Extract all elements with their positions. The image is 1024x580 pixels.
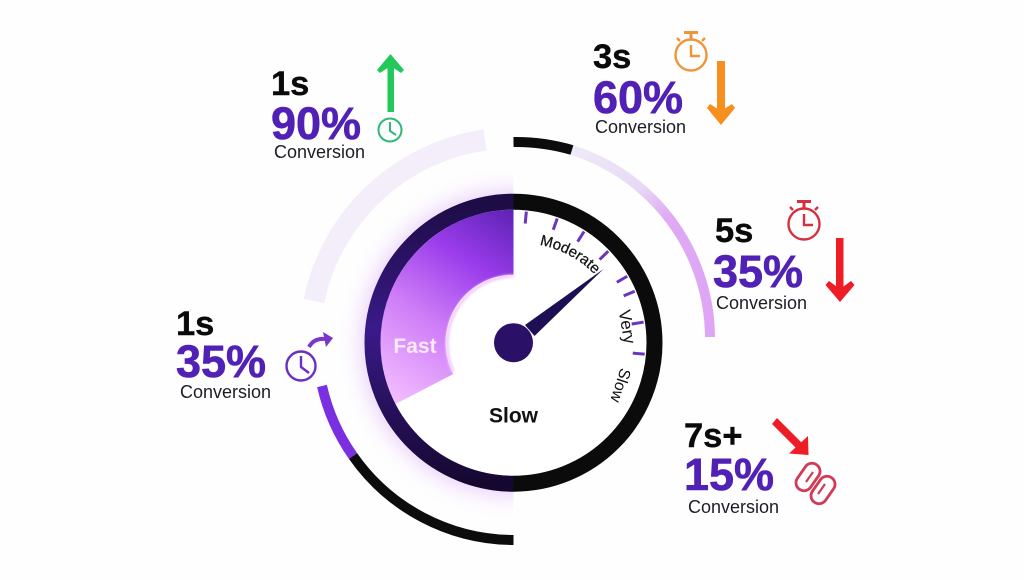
stat: 3s 60%: 60%: [593, 72, 683, 123]
icon: red diagonal arrow: [772, 418, 808, 455]
stat: 1s 35%: 35%: [176, 336, 266, 387]
icon: red down arrow: [826, 238, 854, 302]
stat: 1s 90%: Conversion: [274, 142, 365, 162]
stat: 1s 90%: 1s: [271, 65, 309, 103]
needle: [525, 269, 604, 336]
stat: 1s 35%: 1s: [176, 305, 214, 343]
outer arc: purple bottom-left segment: [322, 386, 353, 456]
speedometer gauge: [352, 180, 662, 505]
stat: 5s 35%: 35%: [713, 246, 803, 297]
needle hub: [494, 323, 533, 362]
label: Slow on dial: Slow: [606, 366, 633, 405]
stat: 1s 35%: [176, 305, 271, 402]
gauge glow: [352, 180, 514, 505]
tick marks: [525, 212, 645, 354]
label: Very: Very: [615, 308, 639, 346]
icon: green clock: [378, 118, 402, 142]
icon: broken chain link: [793, 460, 838, 507]
icon: purple clock: [286, 352, 316, 380]
stat: 7s+ 15%: 7s+: [684, 417, 743, 455]
fast wedge: [381, 210, 514, 404]
stat: 7s+ 15%: Conversion: [688, 497, 779, 517]
icon: red stopwatch: [788, 202, 820, 240]
gauge face: [380, 209, 648, 477]
stat: 7s+ 15%: [684, 417, 779, 517]
icon: purple curved arrow: [309, 332, 333, 347]
label: Slow: Slow: [489, 404, 539, 428]
stat: 1s 35%: Conversion: [180, 382, 271, 402]
stat: 5s 35%: Conversion: [716, 293, 807, 313]
icon: green up arrow: [377, 54, 404, 112]
icon: orange down arrow: [707, 61, 735, 125]
stat: 3s 60%: 3s: [593, 38, 631, 76]
outer arc: fading right segment: [572, 150, 710, 337]
ring right half: [514, 202, 654, 484]
stat: 1s 90%: 90%: [271, 98, 361, 149]
stat: 7s+ 15%: 15%: [684, 449, 774, 500]
stat: 1s 90%: [271, 65, 365, 162]
label: Fast: Fast: [393, 335, 437, 358]
stat: 5s 35%: [713, 212, 807, 313]
outer arc: black top segment: [514, 142, 572, 150]
stat: 3s 60%: [593, 38, 686, 137]
outer arc: pale top-left segment: [314, 140, 485, 301]
ring left half: [372, 202, 514, 484]
stat: 3s 60%: Conversion: [595, 117, 686, 137]
label: Moderate: Moderate: [540, 234, 598, 273]
wedge inner highlight: [447, 276, 514, 372]
icon: orange stopwatch: [676, 32, 706, 70]
stat: 5s 35%: 5s: [715, 212, 753, 250]
outer arc: black bottom segment: [353, 456, 514, 540]
